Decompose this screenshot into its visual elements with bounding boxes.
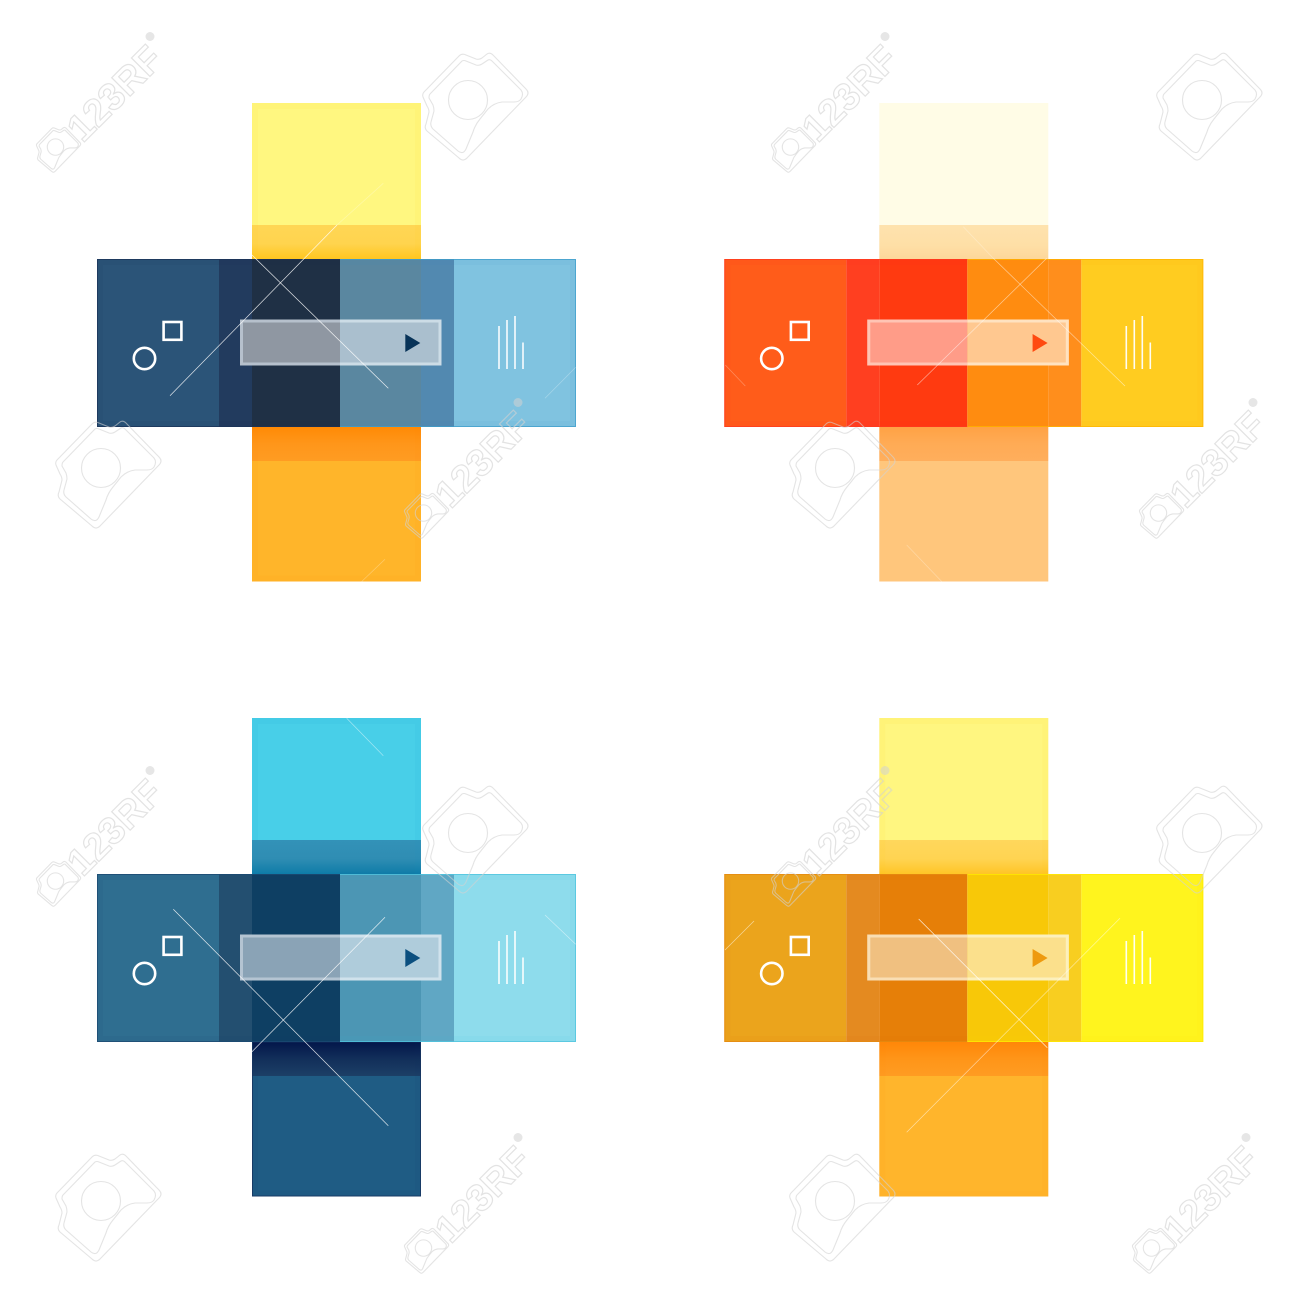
bottom arm (879, 1076, 1048, 1196)
icon: play arrow (1033, 334, 1048, 352)
right panel (454, 874, 576, 1042)
icon: play arrow (405, 334, 420, 352)
top overlap band (879, 225, 1048, 259)
watermark logo: 123RF (794, 38, 906, 150)
icon: bars (1126, 931, 1150, 984)
diagonal line (545, 367, 576, 398)
watermark camera (56, 1154, 161, 1261)
watermark logo (36, 32, 171, 172)
bottom arm frame (255, 1042, 418, 1194)
watermark logo: 123RF (794, 772, 906, 884)
diagonal line (545, 915, 576, 944)
watermark camera (1157, 786, 1262, 893)
dark centre block (879, 259, 967, 427)
top arm (252, 103, 421, 225)
watermark camera (790, 421, 895, 528)
left overlap strip (219, 259, 252, 427)
watermark logo (771, 32, 906, 172)
watermark logo: 123RF (1162, 404, 1274, 516)
left panel edge (98, 260, 340, 426)
icon: bars (499, 931, 523, 984)
icon: circle and square (761, 322, 809, 369)
right panel frame (967, 877, 1200, 1039)
left panel (97, 874, 219, 1042)
right panel (1081, 874, 1203, 1042)
watermark logo (36, 766, 171, 906)
top arm frame (255, 106, 418, 259)
left panel edge (725, 260, 967, 426)
top arm (252, 718, 421, 840)
right panel edge (967, 260, 1203, 426)
watermark camera (423, 786, 528, 893)
cross: red and orange (724, 103, 1203, 582)
cross: blue and cyan (97, 718, 576, 1196)
left overlap strip (846, 259, 879, 427)
right panel edge (967, 874, 1203, 1042)
right overlap strip (421, 259, 454, 427)
watermark camera (423, 53, 528, 160)
mid centre block (967, 874, 1048, 1042)
right panel frame (340, 877, 573, 1039)
watermark logo: 123RF (59, 38, 171, 150)
diagonal line (917, 258, 1047, 385)
top arm frame (255, 721, 418, 874)
bottom arm edge (252, 1042, 420, 1196)
watermark camera (1157, 53, 1262, 160)
diagonal line (252, 255, 388, 388)
left overlap strip (219, 874, 252, 1042)
cross: amber and yellow (724, 718, 1203, 1196)
label bar (240, 934, 442, 980)
left panel edge (725, 874, 967, 1042)
watermark camera (790, 1154, 895, 1261)
diagonal line (907, 545, 942, 582)
top overlap band (252, 225, 421, 259)
mid centre block (340, 259, 421, 427)
mid centre block (967, 259, 1048, 427)
watermark logo: 123RF (427, 404, 539, 516)
diagonal line (173, 909, 388, 1126)
bottom arm (879, 461, 1048, 582)
diagonal line (347, 718, 383, 756)
watermark logo (1132, 1133, 1267, 1273)
top overlap band (252, 840, 421, 874)
label bar (867, 320, 1069, 366)
top arm (879, 718, 1048, 840)
watermark logo: 123RF (427, 1139, 539, 1251)
dark centre block (879, 874, 967, 1042)
watermark logo (771, 766, 906, 906)
left panel (724, 259, 846, 427)
right panel (1081, 259, 1203, 427)
left panel edge (98, 874, 340, 1042)
right overlap strip (1048, 874, 1081, 1042)
bottom arm (252, 461, 421, 582)
left overlap strip (846, 874, 879, 1042)
diagonal line (170, 225, 337, 396)
top arm (879, 103, 1048, 225)
right panel edge (340, 260, 576, 426)
watermark camera (56, 421, 161, 528)
icon: play arrow (1033, 949, 1048, 967)
right panel edge (340, 874, 576, 1042)
diagonal line (725, 921, 754, 950)
top overlap band (879, 840, 1048, 874)
bottom arm frame (255, 427, 418, 578)
left panel frame (727, 262, 967, 424)
left panel frame (100, 877, 340, 1039)
bottom overlap band (879, 1042, 1048, 1076)
bottom arm frame (882, 1042, 1045, 1194)
left panel frame (100, 262, 340, 424)
cross: navy and yellow (97, 103, 576, 582)
watermark logo: 123RF (1155, 1139, 1267, 1251)
diagonal line (362, 559, 385, 582)
label bar (240, 320, 442, 366)
top arm frame (882, 721, 1045, 874)
icon: circle and square (134, 937, 181, 984)
bottom arm (252, 1076, 421, 1196)
bottom overlap band (252, 427, 421, 461)
watermark logo: 123RF (59, 772, 171, 884)
icon: bars (499, 316, 523, 369)
dark centre block (252, 259, 340, 427)
right panel frame (967, 262, 1200, 424)
diagonal line (993, 258, 1125, 386)
diagonal line (252, 917, 385, 1052)
watermark logo (404, 398, 539, 538)
left panel (724, 874, 846, 1042)
left panel (97, 259, 219, 427)
dark centre block (252, 874, 340, 1042)
right panel frame (340, 262, 573, 424)
icon: circle and square (134, 322, 181, 369)
right panel (454, 259, 576, 427)
left panel frame (727, 877, 967, 1039)
watermark logo (1139, 398, 1274, 538)
right overlap strip (1048, 259, 1081, 427)
bottom overlap band (879, 427, 1048, 461)
diagonal line (919, 919, 1047, 1048)
diagonal line (725, 365, 745, 386)
bottom overlap band (252, 1042, 421, 1076)
icon: bars (1126, 316, 1150, 369)
label bar (867, 934, 1069, 980)
diagonal line faint (337, 183, 383, 225)
diagonal line faint (963, 227, 993, 258)
right overlap strip (421, 874, 454, 1042)
diagonal line (907, 918, 1120, 1132)
mid centre block (340, 874, 421, 1042)
icon: circle and square (761, 937, 809, 984)
watermark logo (404, 1133, 539, 1273)
icon: play arrow (405, 949, 420, 967)
